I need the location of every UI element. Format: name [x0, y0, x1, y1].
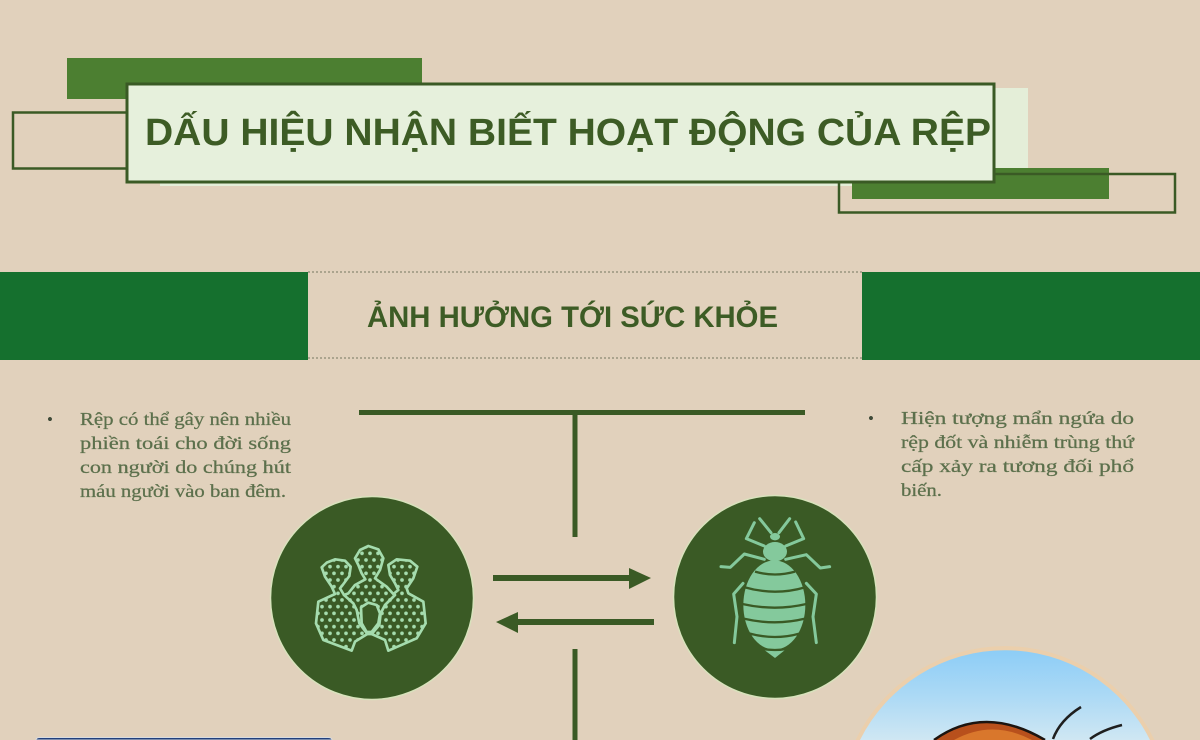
left text block: con người do chúng hút [80, 457, 291, 477]
icon: people circle [270, 496, 474, 700]
left text block [47, 409, 291, 501]
right text block: biến. [901, 480, 942, 500]
right text block [868, 408, 1136, 500]
photo: bug illustration circle [856, 646, 1154, 740]
antennae [1053, 707, 1122, 739]
left text block: phiền toái cho đời sống [80, 433, 291, 453]
bottom-left navy box [36, 738, 332, 740]
icon: group of people [316, 546, 426, 651]
title banner [13, 58, 1175, 212]
bug shell [934, 722, 1045, 740]
connector bottom [572, 649, 578, 740]
right text block: cấp xảy ra tương đối phổ [901, 456, 1134, 476]
right text block: • [868, 409, 874, 428]
title text: DẤU HIỆU NHẬN BIẾT HOẠT ĐỘNG CỦA RỆP [145, 109, 991, 154]
arrow: right [493, 568, 651, 589]
left text block: • [47, 410, 53, 429]
right text block: rệp đốt và nhiễm trùng thứ [901, 432, 1136, 452]
icon: bed bug circle [674, 496, 876, 698]
left text block: Rệp có thể gây nên nhiều [80, 409, 291, 429]
T-shaped connector top [359, 410, 805, 537]
right text block: Hiện tượng mẩn ngứa do [901, 408, 1134, 428]
arrow: left [496, 612, 654, 633]
section heading band [0, 272, 1200, 360]
left text block: máu người vào ban đêm. [80, 481, 286, 501]
icon: bed bug [721, 519, 830, 658]
section heading text: ẢNH HƯỞNG TỚI SỨC KHỎE [367, 300, 778, 334]
